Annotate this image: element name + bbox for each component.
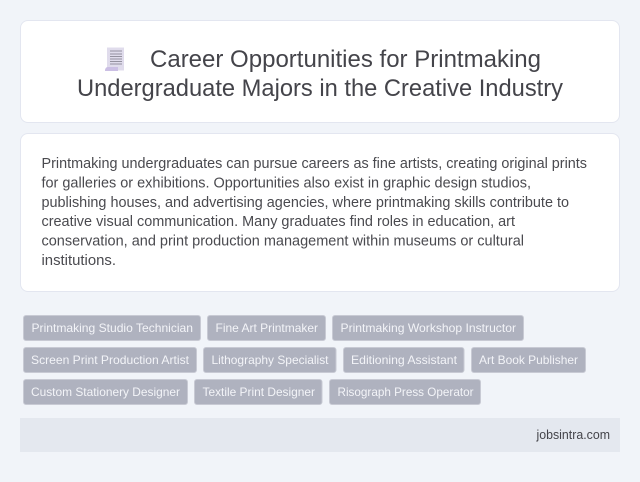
chip: Art Book Publisher: Art Book Publisher <box>479 353 578 367</box>
panel: title card <box>20 20 620 122</box>
description text: conservation, and print production management within museums or cultural <box>42 234 524 250</box>
icon: printed scroll <box>105 48 124 71</box>
description text <box>42 156 587 269</box>
chip: Fine Art Printmaker <box>208 316 326 340</box>
chip: Fine Art Printmaker: Fine Art Printmaker <box>216 321 318 335</box>
chip: Lithography Specialist: Lithography Specialist <box>212 353 329 367</box>
chip: Printmaking Studio Technician: Printmaking Studio Technician <box>32 321 193 335</box>
footer text: jobsintra.com <box>536 428 610 442</box>
panel: footer bar <box>20 418 620 452</box>
chip: Printmaking Studio Technician <box>24 316 200 340</box>
description text: creative visual communication. Many graduates find roles in education, art <box>42 214 515 230</box>
chip: Printmaking Workshop Instructor: Printmaking Workshop Instructor <box>340 321 516 335</box>
chip: Screen Print Production Artist <box>24 348 196 372</box>
chip: Editioning Assistant: Editioning Assistant <box>351 353 458 367</box>
title: Career Opportunities for Printmaking <box>150 46 541 73</box>
chip: Risograph Press Operator: Risograph Press Operator <box>338 385 474 399</box>
chip: Custom Stationery Designer <box>24 380 188 404</box>
description text: for galleries or exhibitions. Opportunities also exist in graphic design studios, <box>42 176 531 192</box>
chip: Art Book Publisher <box>472 348 586 372</box>
chip: Lithography Specialist <box>204 348 336 372</box>
chip: Printmaking Workshop Instructor <box>332 316 524 340</box>
title: Undergraduate Majors in the Creative Industry <box>77 75 563 102</box>
title <box>77 46 563 102</box>
chip: Editioning Assistant <box>344 348 464 372</box>
chip: Custom Stationery Designer: Custom Stationery Designer <box>31 385 180 399</box>
career tag chips <box>24 316 586 404</box>
description text: institutions. <box>42 253 116 269</box>
chip: Risograph Press Operator <box>330 380 480 404</box>
description text: publishing houses, and advertising agencies, where printmaking skills contribute to <box>42 195 569 211</box>
panel: description card <box>20 133 620 292</box>
chip: Textile Print Designer: Textile Print Designer <box>202 385 315 399</box>
chip: Screen Print Production Artist: Screen Print Production Artist <box>31 353 190 367</box>
description text: Printmaking undergraduates can pursue careers as fine artists, creating original prints <box>42 156 587 172</box>
chip: Textile Print Designer <box>194 380 322 404</box>
